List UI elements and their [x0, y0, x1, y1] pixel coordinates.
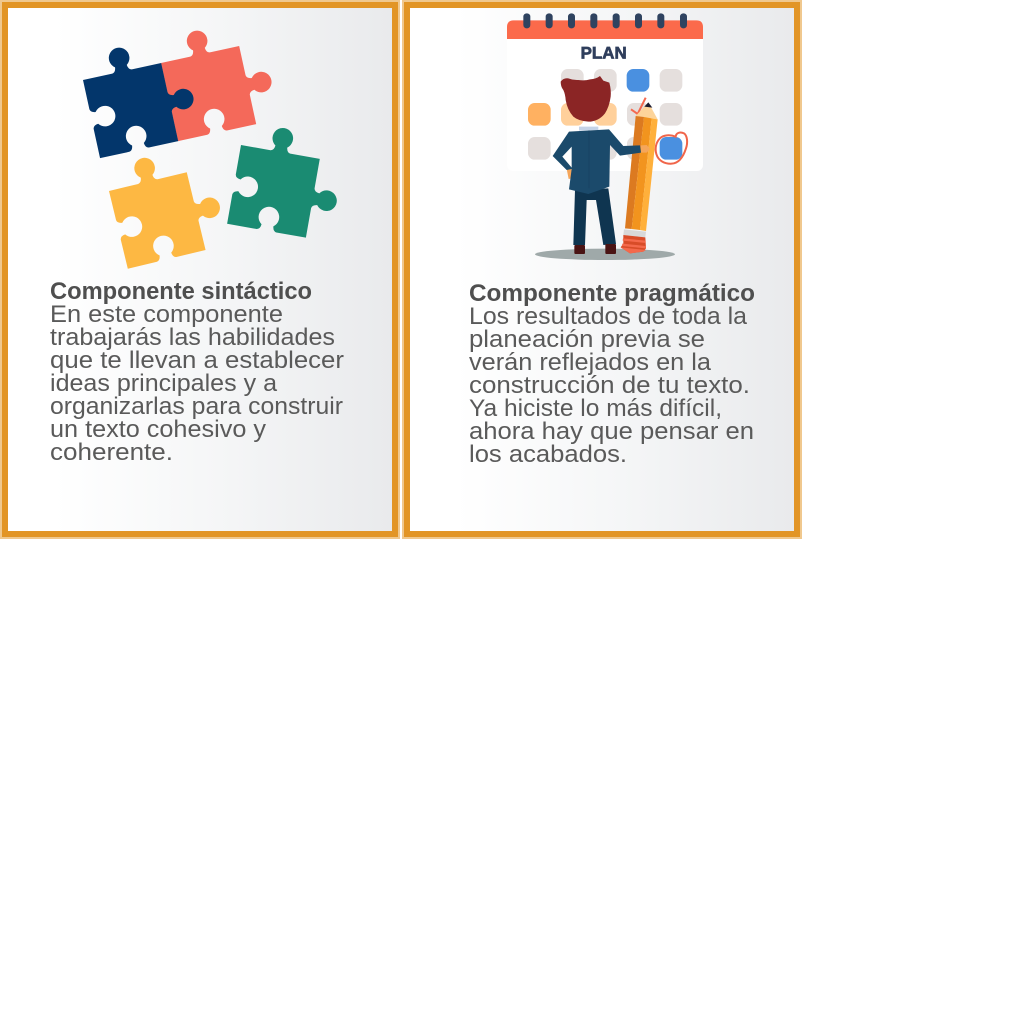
- text block: sintáctico description: [50, 301, 344, 466]
- icon: pencil: [621, 102, 658, 253]
- figure: man in suit: [553, 76, 650, 254]
- puzzle piece: green: [227, 121, 348, 242]
- text block: pragmático description: construcción de tu texto.: [469, 372, 750, 399]
- icon: calendar: [507, 13, 703, 171]
- text block: sintáctico description: organizarlas para construir: [50, 393, 343, 420]
- hair: [561, 76, 611, 122]
- panel frame: right: [402, 0, 802, 539]
- trousers: [573, 188, 616, 245]
- jacket: [553, 129, 641, 194]
- illustration: calendar and person with pencil: [507, 13, 703, 260]
- text block: pragmático description: Ya hiciste lo más difícil,: [469, 395, 722, 422]
- collar: [579, 127, 598, 131]
- text block: pragmático description: los acabados.: [469, 441, 627, 468]
- icon: puzzle pieces: [78, 17, 348, 269]
- text block: sintáctico description: que te llevan a establecer: [50, 347, 344, 374]
- icon: calendar: PLAN: [581, 44, 627, 62]
- panel: componente sintáctico: [0, 0, 400, 539]
- text block: sintáctico description: trabajarás las habilidades: [50, 324, 335, 351]
- shadow: [535, 249, 675, 260]
- icon: check mark: [631, 98, 646, 114]
- puzzle piece: navy: [78, 34, 202, 158]
- left hand: [567, 168, 572, 179]
- right hand: [641, 145, 650, 153]
- heading: componente sintáctico: Componente sintáctico: [50, 278, 312, 305]
- text block: sintáctico description: un texto cohesivo y: [50, 416, 266, 443]
- puzzle piece: coral: [156, 17, 280, 141]
- text block: pragmático description: [469, 303, 754, 468]
- shoes: [574, 244, 616, 254]
- text block: sintáctico description: ideas principales y a: [50, 370, 278, 397]
- heading: componente pragmático: Componente pragmático: [469, 280, 755, 307]
- text block: pragmático description: ahora hay que pensar en: [469, 418, 754, 445]
- text block: sintáctico description: En este componente: [50, 301, 283, 328]
- text block: pragmático description: planeación previa se: [469, 326, 705, 353]
- text block: pragmático description: Los resultados de toda la: [469, 303, 748, 330]
- text block: pragmático description: verán reflejados en la: [469, 349, 712, 376]
- icon: red circle: [656, 132, 687, 164]
- puzzle piece: yellow: [103, 143, 229, 269]
- panel frame: left: [0, 0, 400, 539]
- text block: sintáctico description: coherente.: [50, 439, 173, 466]
- panel: componente pragmático: [402, 0, 802, 539]
